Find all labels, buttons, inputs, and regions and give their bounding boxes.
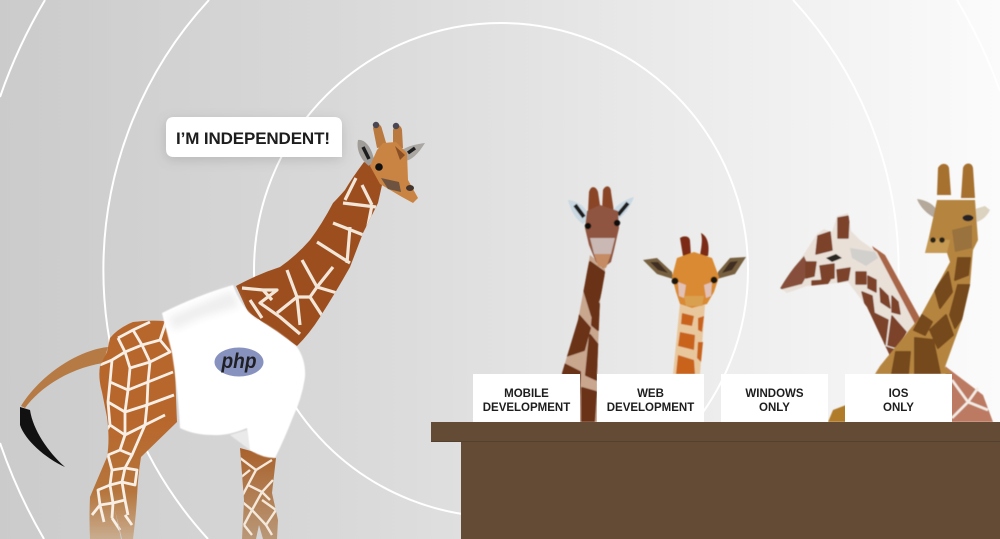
giraffe: mobile development: [555, 186, 634, 425]
desk: [431, 422, 1000, 539]
head: [358, 122, 425, 203]
neck: [561, 254, 606, 422]
neck and head: [874, 199, 979, 374]
face: [585, 205, 619, 268]
face: [370, 142, 418, 203]
rear neck: [872, 246, 921, 332]
label: ios only: ONLY: [883, 402, 914, 414]
label: mobile development: DEVELOPMENT: [483, 402, 570, 414]
neck: [236, 162, 382, 346]
giraffe: ios only: [870, 164, 990, 380]
speech bubble: I’M INDEPENDENT!: [176, 129, 330, 148]
body behind: [945, 366, 993, 422]
hind body and legs: [90, 320, 177, 539]
label: ios only: IOS: [889, 388, 909, 400]
label: web development: DEVELOPMENT: [607, 402, 694, 414]
tail: [20, 347, 108, 467]
label: windows only: ONLY: [759, 402, 790, 414]
face: [672, 252, 719, 308]
horns: [373, 124, 403, 148]
label: mobile development: [473, 374, 580, 422]
head and neck: [780, 213, 916, 356]
php logo: [214, 348, 264, 376]
ears: [568, 200, 590, 224]
t-shirt: [162, 285, 305, 458]
speech bubble: [166, 117, 342, 157]
label: ios only: [845, 374, 952, 422]
giraffe: web development: [643, 233, 746, 374]
horns: [588, 186, 614, 212]
front leg: [240, 448, 278, 539]
label: mobile development: MOBILE: [504, 388, 549, 400]
independent giraffe: [20, 122, 425, 539]
php logo: php: [221, 350, 257, 373]
ears: [917, 199, 938, 218]
ears: [358, 140, 374, 166]
giraffe: windows only: [775, 205, 993, 422]
horns: [680, 233, 709, 256]
label: windows only: WINDOWS: [745, 388, 804, 400]
label: windows only: [721, 374, 828, 422]
neck: [673, 303, 705, 374]
horns: [937, 164, 975, 198]
label: web development: [597, 374, 704, 422]
label: web development: WEB: [637, 388, 664, 400]
ears: [643, 258, 673, 279]
